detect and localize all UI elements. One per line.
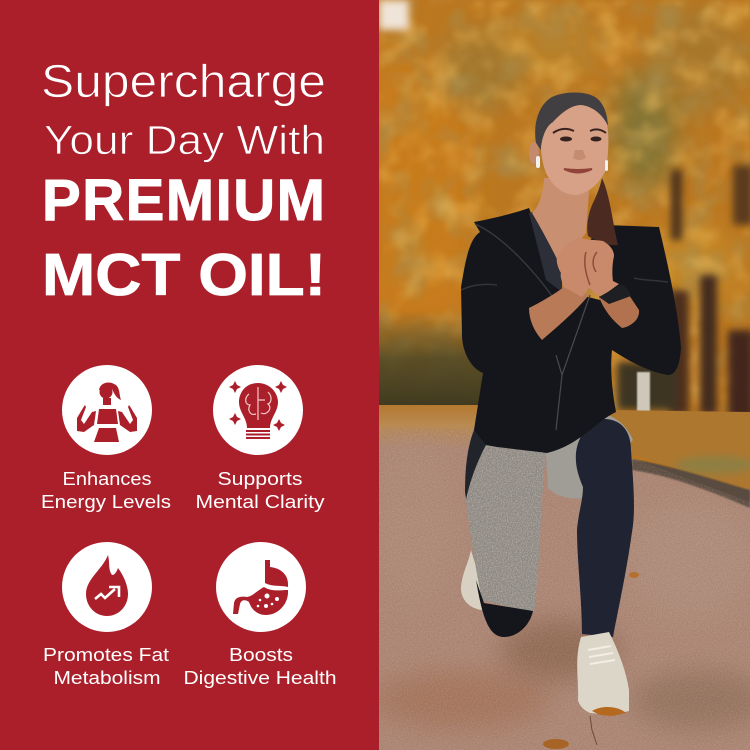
forearm: right (599, 295, 639, 328)
back leg: dark side panel (465, 430, 488, 500)
benefit labels: Mental Clarity (196, 492, 324, 512)
face (541, 105, 608, 195)
title: PREMIUM (42, 168, 325, 233)
benefit labels: Metabolism (54, 668, 160, 688)
benefit: digestive health (216, 542, 306, 632)
front thigh: grey (546, 413, 633, 499)
dark inner top (529, 212, 562, 292)
benefit labels: Promotes Fat (43, 645, 169, 665)
forearm: left (529, 287, 589, 340)
icon: stomach (233, 560, 288, 615)
jacket (461, 208, 681, 453)
hair (535, 92, 608, 150)
facial features (536, 129, 608, 172)
benefit: energy levels (62, 365, 152, 455)
ponytail (587, 178, 618, 245)
front shin: navy leggings (576, 419, 634, 637)
autumn foliage background (379, 0, 750, 502)
benefit: mental clarity (213, 365, 303, 455)
back knee (476, 580, 533, 637)
benefit: fat metabolism (62, 542, 152, 632)
icon: flame drop with rising arrow (86, 555, 128, 616)
front shoe (577, 632, 629, 716)
benefit labels: Enhances (62, 469, 152, 489)
ear (529, 142, 539, 164)
smartwatch (599, 284, 631, 304)
clasped hands (557, 238, 619, 297)
benefit labels (41, 469, 336, 688)
benefit labels: Boosts (229, 645, 293, 665)
back leg: grey thigh (466, 445, 546, 613)
benefit labels: Energy Levels (41, 492, 171, 512)
ground: leaf-strewn verge, kerb and road (370, 405, 750, 750)
title (41, 55, 326, 308)
title: Your Day With (44, 117, 325, 163)
photo: woman lunging on an autumn park path (370, 0, 750, 750)
benefit labels: Digestive Health (184, 668, 336, 688)
panel: red benefits column (0, 0, 379, 750)
title: Supercharge (41, 55, 326, 107)
benefit labels: Supports (218, 469, 302, 489)
icon: brain in light bulb (229, 381, 287, 438)
chest and neck (532, 178, 590, 265)
icon: athletic woman (77, 382, 137, 442)
back shoe (461, 550, 485, 610)
title: MCT OIL! (42, 242, 326, 308)
